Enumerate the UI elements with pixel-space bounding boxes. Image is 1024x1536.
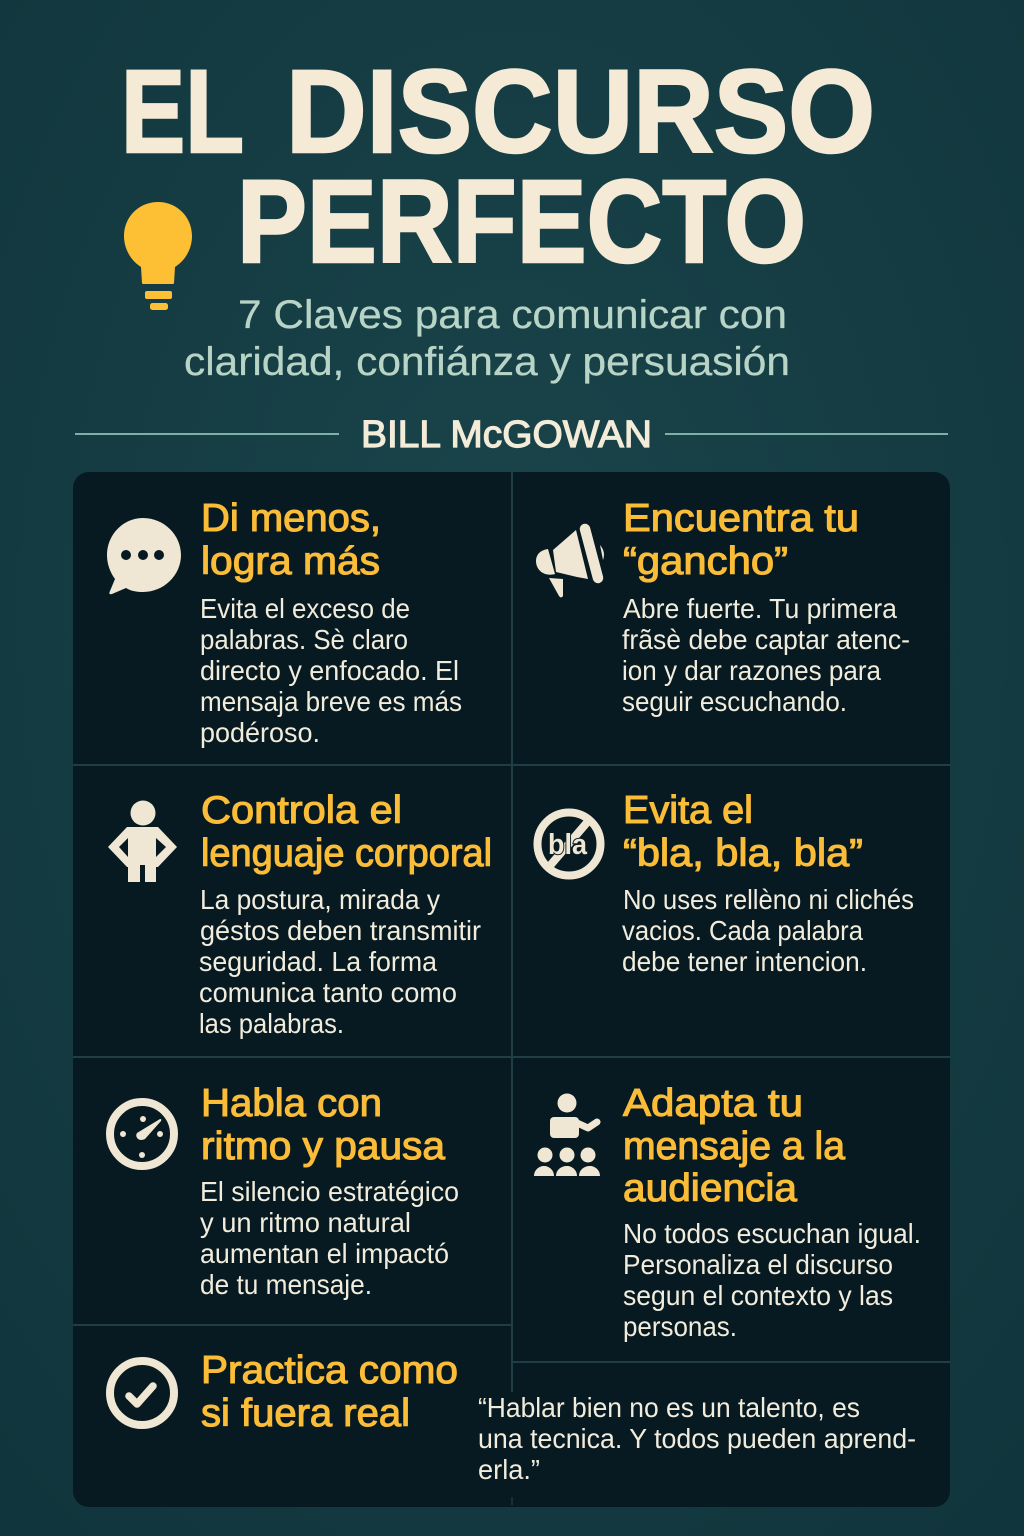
- card: Habla con ritmo y pausa: [110, 1082, 459, 1300]
- heading: “bla, bla, bla”: [623, 832, 863, 875]
- icon: standing person: [108, 800, 177, 882]
- card: Evita el bla bla bla: [538, 789, 914, 977]
- heading: Controla el: [201, 789, 402, 832]
- body text: [622, 593, 910, 717]
- heading: logra más: [201, 540, 380, 583]
- body text: las palabras.: [199, 1008, 344, 1039]
- body text: No uses rellèno ni clichés: [623, 884, 914, 915]
- body text: [622, 884, 914, 977]
- heading: [623, 497, 859, 583]
- quote: una tecnica. Y todos pueden aprend-: [478, 1423, 916, 1454]
- author with divider lines: BILL McGOWAN: [361, 414, 652, 456]
- icon: light bulb: [124, 202, 192, 310]
- quote: erla.”: [478, 1454, 540, 1485]
- body text: seguridad. La forma: [199, 946, 438, 977]
- body text: Evita el exceso de: [200, 593, 410, 624]
- title: EL: [121, 46, 244, 178]
- heading: ritmo y pausa: [201, 1125, 445, 1168]
- body text: ion y dar razones para: [622, 655, 882, 686]
- card: Adapta tu mensaje a la audiencia: [534, 1082, 921, 1342]
- heading: lenguaje corporal: [201, 832, 492, 875]
- heading: Di menos,: [201, 497, 381, 540]
- heading: Encuentra tu: [623, 497, 859, 540]
- heading: mensaje a la: [623, 1125, 845, 1168]
- card: Encuentra tu gancho: [536, 497, 910, 717]
- body text: de tu mensaje.: [200, 1269, 372, 1300]
- body text: directo y enfocado. El: [200, 655, 459, 686]
- icon: speaker and audience: [534, 1094, 600, 1176]
- body text: Personaliza el discurso: [623, 1249, 893, 1280]
- icon: speech bubble: [107, 518, 181, 594]
- icon: no bla: [538, 812, 600, 876]
- body text: podéroso.: [200, 717, 320, 748]
- body text: El silencio estratégico: [200, 1176, 459, 1207]
- card: Practica como si fuera real: [110, 1349, 458, 1435]
- body text: aumentan el impactó: [200, 1238, 449, 1269]
- quote: “Hablar bien no es un talento, es: [478, 1392, 860, 1423]
- subtitle: claridad, confiánza y persuasión: [184, 340, 790, 384]
- heading: [201, 1082, 445, 1168]
- heading: Practica como: [201, 1349, 458, 1392]
- heading: [201, 1349, 458, 1435]
- card: Di menos, logra más: [107, 497, 462, 748]
- body text: y un ritmo natural: [200, 1207, 411, 1238]
- title: DISCURSO: [286, 46, 875, 178]
- title: [121, 46, 875, 288]
- quote: [478, 1392, 916, 1485]
- body text: [623, 1218, 921, 1342]
- body text: personas.: [623, 1311, 737, 1342]
- body text: debe tener intencion.: [622, 946, 867, 977]
- heading: Evita el: [623, 789, 753, 832]
- body text: palabras. Sè claro: [200, 624, 408, 655]
- body text: mensaja breve es más: [200, 686, 462, 717]
- heading: [623, 1082, 845, 1210]
- body text: vacios. Cada palabra: [622, 915, 864, 946]
- icon: check circle: [110, 1361, 174, 1425]
- subtitle: [184, 293, 790, 384]
- body text: seguir escuchando.: [622, 686, 847, 717]
- heading: Adapta tu: [623, 1082, 803, 1125]
- icon: no bla: bla: [548, 829, 588, 861]
- heading: si fuera real: [201, 1392, 410, 1435]
- body text: [200, 1176, 459, 1300]
- panel: seven keys grid: [73, 472, 950, 1507]
- body text: segun el contexto y las: [623, 1280, 893, 1311]
- body text: No todos escuchan igual.: [623, 1218, 921, 1249]
- icon: gauge clock: [110, 1102, 174, 1166]
- subtitle: 7 Claves para comunicar con: [238, 293, 787, 337]
- heading: [623, 789, 863, 875]
- icon: megaphone: [536, 529, 604, 598]
- body text: géstos deben transmitir: [200, 915, 481, 946]
- title: PERFECTO: [237, 156, 806, 288]
- heading: Habla con: [201, 1082, 382, 1125]
- card: Controla el lenguaje corporal: [108, 789, 492, 1039]
- body text: [199, 884, 481, 1039]
- heading: [201, 789, 492, 875]
- heading: audiencia: [623, 1167, 797, 1210]
- heading: “gancho”: [623, 540, 788, 583]
- body text: [200, 593, 462, 748]
- body text: La postura, mirada y: [200, 884, 440, 915]
- body text: frãsè debe captar atenc-: [622, 624, 910, 655]
- heading: [201, 497, 381, 583]
- body text: Abre fuerte. Tu primera: [623, 593, 898, 624]
- body text: comunica tanto como: [199, 977, 457, 1008]
